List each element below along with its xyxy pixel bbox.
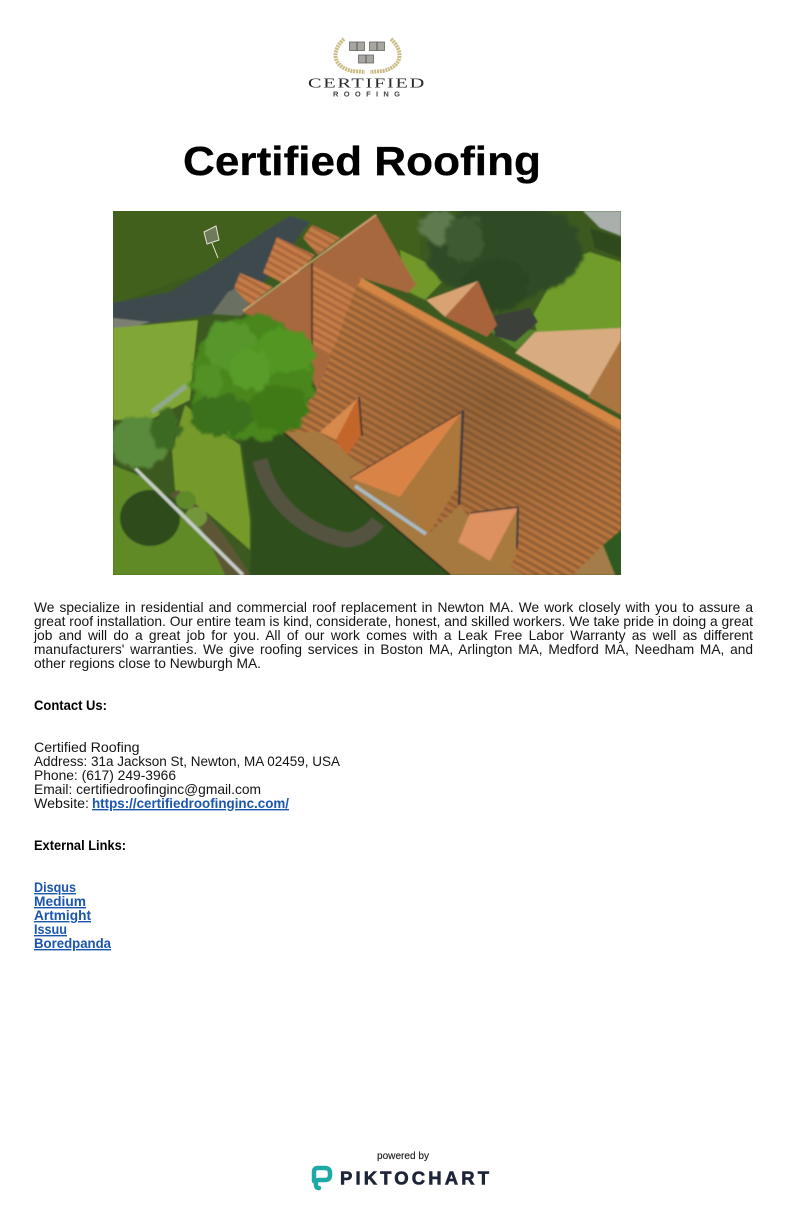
- left shrub: [110, 408, 179, 468]
- shaded lawn near path: [240, 430, 450, 575]
- ridge band: [358, 278, 621, 430]
- external links list: Issuu: [34, 921, 67, 937]
- paragraph: company description: great roof installation. Our entire team is kind, considerate, honest, and skilled workers. We take pride in doing a great: [34, 613, 753, 629]
- icon: laurel wreath: [335, 39, 400, 72]
- paragraph: company description: job and will do a great job for you. All of our work comes with a Leak Free Labor Warranty as well as different: [33, 627, 753, 643]
- contact details: Email: certifiedroofinginc@gmail.com: [34, 781, 261, 797]
- right bright lawn: [533, 252, 621, 333]
- right dormer: [515, 328, 621, 396]
- large green tree: [190, 316, 315, 440]
- external links list: [34, 879, 111, 951]
- upper-left shaded lawn: [122, 214, 410, 300]
- bottom right corner: [573, 545, 617, 575]
- icon: three books: [350, 42, 384, 63]
- contact details: Phone: (617) 249-3966: [34, 767, 176, 783]
- lawn below patio: [488, 330, 537, 350]
- heading: Contact Us: Contact Us:: [34, 697, 107, 713]
- contact details: [34, 739, 341, 811]
- gable: top small: [303, 225, 340, 255]
- right upper dormer: [426, 281, 478, 317]
- mid bright lawn patch: [400, 250, 442, 300]
- paragraph: company description: manufacturers' warranties. We give roofing services in Boston MA, Arlington MA, Medford MA, Needham MA, and: [34, 641, 753, 657]
- logo wordmark: CERTIFIED: [308, 76, 426, 92]
- contact details: Address: 31a Jackson St, Newton, MA 02459, USA: [34, 753, 341, 769]
- external links list: Disqus: [34, 879, 76, 895]
- white picket fence: [135, 468, 243, 575]
- logo tagline: ROOFING: [333, 90, 400, 98]
- small front dormer right: [458, 508, 518, 561]
- icon: Piktochart logo: [314, 1168, 330, 1188]
- external links list: Artmight: [34, 907, 91, 923]
- paragraph: company description: We specialize in residential and commercial roof replacement in Newton MA. We work closely with you to assure a: [34, 599, 753, 615]
- paragraph: company description: other regions close to Newburgh MA.: [34, 655, 261, 671]
- garden bed: [170, 490, 250, 575]
- top-right pale patch: [583, 211, 621, 236]
- photo: aerial view of house roof: [110, 202, 621, 575]
- main roof plane: [283, 277, 621, 575]
- right hedge: [590, 228, 621, 258]
- basketball hoop: [204, 226, 219, 258]
- footer: powered by Piktochart: [314, 1151, 490, 1188]
- external links list: Boredpanda: [34, 935, 111, 951]
- tan lower eave: [285, 432, 525, 575]
- external links list: Medium: [34, 893, 86, 909]
- title: Certified Roofing: [183, 138, 541, 184]
- logo: Certified Roofing: [308, 39, 426, 98]
- gable: middle: [263, 237, 315, 285]
- powered by label: powered by: [377, 1151, 429, 1162]
- contact details: Website:: [34, 795, 89, 811]
- upper right dark tree: [418, 202, 583, 311]
- big front dormer: [350, 412, 462, 497]
- curved garden path: [260, 460, 378, 540]
- centre lawn: [172, 405, 250, 550]
- upper roof plane: [243, 215, 416, 395]
- contact details: Certified Roofing: [34, 739, 140, 755]
- paragraph: company description: [33, 599, 753, 671]
- upper roof second plane: [312, 266, 356, 354]
- heading: External Links: External Links:: [34, 837, 126, 853]
- roof edge line: [283, 432, 450, 575]
- contact details: https://certifiedroofinginc.com/: [92, 795, 289, 811]
- Piktochart wordmark: PIKTOCHART: [340, 1168, 490, 1188]
- small front dormer left: [320, 398, 358, 440]
- bright lower-left lawn: [113, 320, 198, 420]
- driveway: [113, 216, 310, 326]
- gable: lower: [234, 273, 273, 305]
- patio: [493, 308, 538, 342]
